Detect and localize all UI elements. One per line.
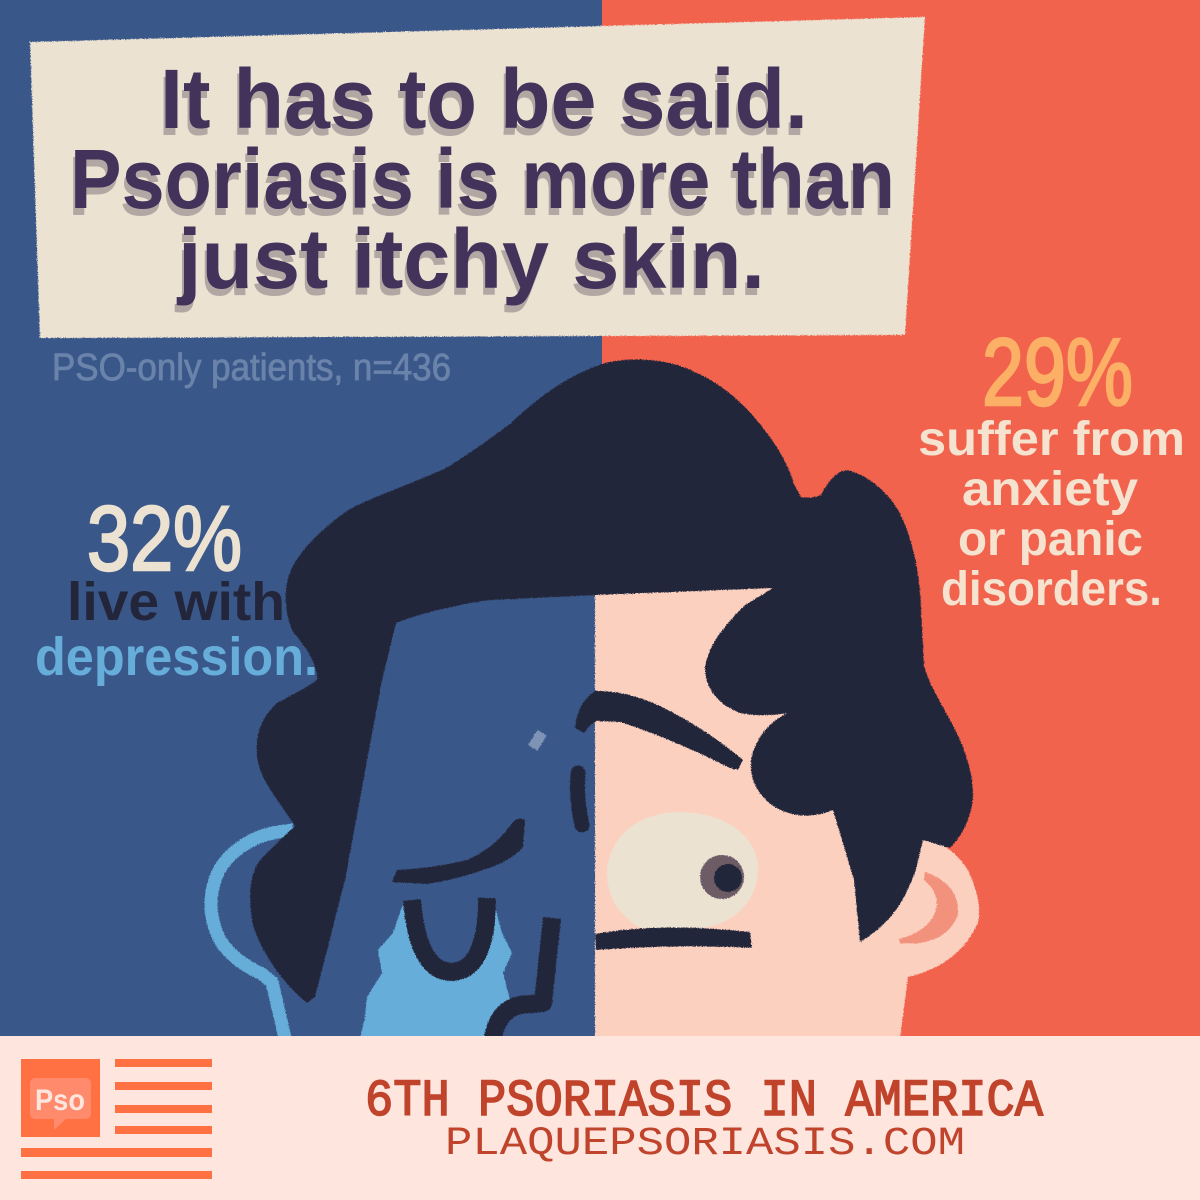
footer url: PLAQUEPSORIASIS.COM (445, 1122, 965, 1167)
logo: Pso flag (21, 1059, 212, 1179)
label: live with: live with (67, 572, 285, 632)
icon: inner ear (899, 872, 958, 943)
title: just itchy skin. (176, 212, 765, 306)
tear (360, 900, 512, 1038)
logo speech bubble (30, 1078, 91, 1130)
stat: 32% depression (35, 488, 318, 687)
flag stripes (21, 1059, 212, 1179)
background: red half (602, 0, 1200, 1040)
footer heading: 6TH PSORIASIS IN AMERICA (365, 1072, 1044, 1131)
label: depression: depression. (35, 627, 318, 687)
label: anxiety or panic disorders: disorders. (941, 563, 1162, 616)
label: anxiety or panic disorders (918, 413, 1185, 616)
label: anxiety or panic disorders: or panic (958, 513, 1143, 566)
number: 32%: 32% (87, 488, 242, 590)
eyebrow crease (578, 773, 582, 825)
speck (528, 730, 547, 751)
eye: pupil (700, 855, 744, 899)
label: anxiety or panic disorders: anxiety (962, 463, 1138, 516)
eye: lower lid (595, 927, 752, 950)
eyebrow: lowered (392, 818, 525, 884)
logo square (21, 1059, 100, 1137)
label: anxiety or panic disorders: suffer from (918, 413, 1185, 466)
footnote: sample: PSO-only patients, n=436 (52, 347, 451, 389)
title (70, 52, 895, 306)
nose (493, 918, 552, 1038)
ear: sad side outline (211, 830, 293, 1038)
face: skin (595, 585, 979, 1038)
title: Psoriasis is more than (70, 132, 895, 226)
illustration: half-and-half face (211, 359, 979, 1038)
title: It has to be said. (160, 52, 808, 146)
eyebrow: raised (575, 691, 743, 770)
number: 29%: 29% (982, 319, 1133, 426)
title panel (30, 17, 925, 338)
eye: closed, downcast (412, 898, 487, 972)
footer band (0, 1036, 1200, 1200)
hair (250, 359, 973, 1003)
eye: open sclera (607, 812, 758, 928)
stat: 29% anxiety (918, 319, 1185, 616)
background: blue half (0, 0, 602, 1040)
logo text: Pso (35, 1084, 85, 1117)
